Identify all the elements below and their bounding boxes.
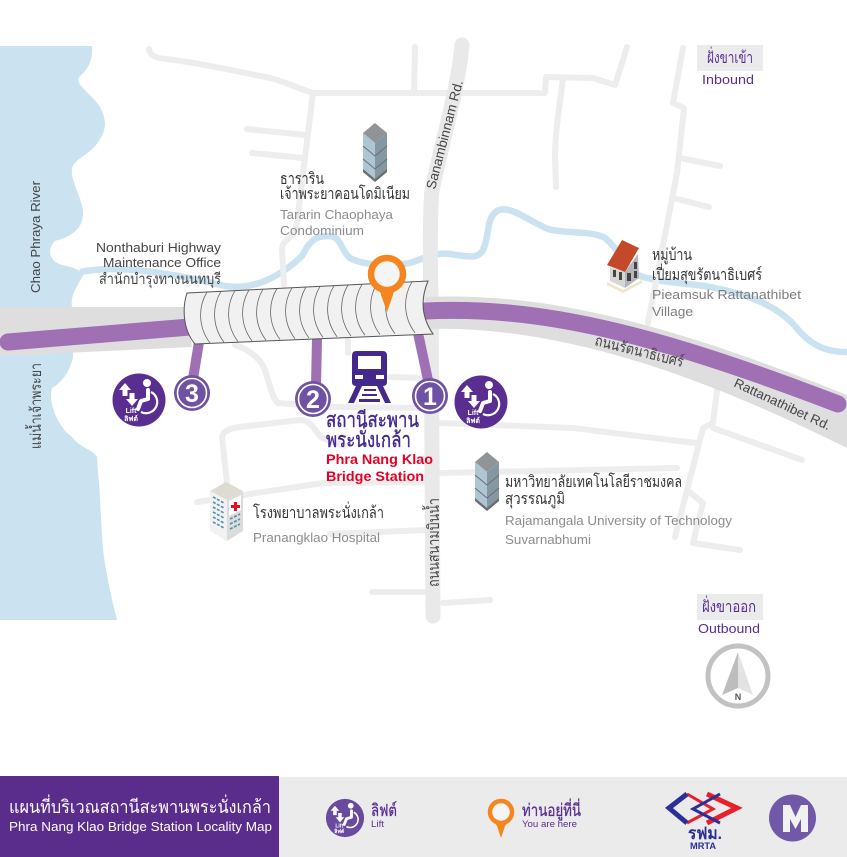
station name (326, 409, 433, 484)
legend: you are here: You are here (522, 819, 577, 829)
inbound tag (697, 45, 763, 87)
station name: Phra Nang Klao (326, 451, 433, 467)
exit 3 badge: 3 (185, 380, 199, 408)
label: Piamsuk village: Village (652, 304, 693, 319)
label: Tararin condominium: Tararin Chaophaya (280, 207, 394, 222)
road label: Rattanathibet: Rattanathibet Rd. (732, 375, 833, 433)
inbound tag: Inbound (702, 72, 754, 87)
river label: Thai: แม่น้ำเจ้าพระยา (25, 363, 45, 449)
you are here pin (371, 258, 403, 312)
label: hospital: โรงพยาบาลพระนั่งเกล้า (253, 501, 384, 522)
legend: you are here: ท่านอยู่ที่นี่ (522, 798, 581, 821)
logo: MRTA (669, 794, 737, 851)
label: Nonthaburi highway office: สำนักบำรุงทางนนทบุรี (99, 271, 221, 289)
label: university: Rajamangala University of Technology (505, 513, 733, 528)
lift icon right (454, 376, 508, 428)
logo: MRTA: MRTA (690, 841, 717, 851)
compass: N (735, 692, 741, 702)
lift icon right: Lift (468, 410, 479, 417)
label: hospital (253, 501, 384, 545)
Rattanathibet road (0, 296, 847, 448)
label: university (505, 472, 733, 547)
compass (708, 646, 768, 706)
legend: lift: ลิฟต์ (334, 828, 344, 835)
station name: สถานีสะพาน (326, 409, 419, 432)
legend: you are here (490, 798, 581, 838)
legend: lift: Lift (371, 819, 385, 829)
icon: house (607, 240, 642, 293)
exit 2 badge (295, 381, 331, 417)
label: Tararin condominium: Condominium (280, 223, 364, 238)
outbound tag: ฝั่งขาออก (702, 595, 756, 616)
label: Nonthaburi highway office (96, 240, 222, 289)
lift icon left: Lift (126, 408, 137, 415)
footer title panel (0, 776, 279, 857)
footer title panel: แผนที่บริเวณสถานีสะพานพระนั่งเกล้า (9, 794, 271, 817)
inbound tag: ฝั่งขาเข้า (707, 46, 753, 67)
icon: university building (475, 452, 499, 511)
label: Nonthaburi highway office: Nonthaburi Highway (96, 240, 222, 255)
footer title panel: Phra Nang Klao Bridge Station Locality Map (9, 820, 272, 834)
label: university: สุวรรณภูมิ (505, 491, 565, 509)
road label: Sanambinnam Thai: ถนนสนามบินน้ำ (422, 498, 443, 587)
label: Nonthaburi highway office: Maintenance Office (103, 255, 221, 270)
elevated purple line (8, 310, 838, 404)
road label: Rattanathibet Thai: ถนนรัตนาธิเบศร์ (593, 332, 685, 371)
label: Piamsuk village (652, 246, 801, 319)
logo: MRTA: รฟม. (688, 824, 722, 843)
station exits connectors (192, 333, 428, 387)
label: university: Suvarnabhumi (505, 532, 591, 547)
footer bar (0, 777, 847, 857)
label: hospital: Pranangklao Hospital (253, 530, 380, 545)
label: Piamsuk village: หมู่บ้าน (652, 246, 692, 265)
lift icon right: ลิฟต์ (465, 416, 480, 425)
outbound tag: Outbound (698, 621, 760, 636)
legend: lift: ลิฟต์ (371, 801, 397, 820)
legend: lift: Lift (335, 823, 343, 829)
icon: condominium building (363, 123, 387, 182)
legend: lift (326, 799, 397, 837)
station name: พระนั่งเกล้า (326, 425, 411, 452)
label: Piamsuk village: เปี่ยมสุขรัตนาธิเบศร์ (652, 263, 762, 285)
label: Piamsuk village: Pieamsuk Rattanathibet (652, 287, 801, 302)
road label: Sanambinnam: Sanambinnam Rd. (423, 79, 466, 191)
label: Tararin condominium: ธาราริน (280, 171, 324, 188)
icon: train (348, 351, 391, 403)
exit 1 badge: 1 (423, 383, 437, 411)
exit 1 badge (412, 378, 448, 414)
label: Tararin condominium (280, 171, 410, 238)
Chao Phraya river (0, 46, 117, 620)
exit 3 badge (174, 375, 210, 411)
station name: Bridge Station (326, 468, 424, 484)
logo: M (769, 794, 816, 842)
station roof (184, 281, 433, 344)
label: university: มหาวิทยาลัยเทคโนโลยีราชมงคล (505, 472, 682, 491)
river label: Chao Phraya: Chao Phraya River (28, 180, 43, 293)
icon: hospital (210, 482, 243, 541)
lift icon left (112, 374, 166, 426)
outbound tag (697, 594, 763, 636)
lift icon left: ลิฟต์ (123, 414, 138, 423)
minor roads (149, 47, 802, 603)
label: Tararin condominium: เจ้าพระยาคอนโดมิเนียม (280, 184, 410, 203)
canal (80, 209, 847, 352)
Sanambinnam road (430, 45, 462, 616)
exit 2 badge: 2 (306, 386, 320, 414)
